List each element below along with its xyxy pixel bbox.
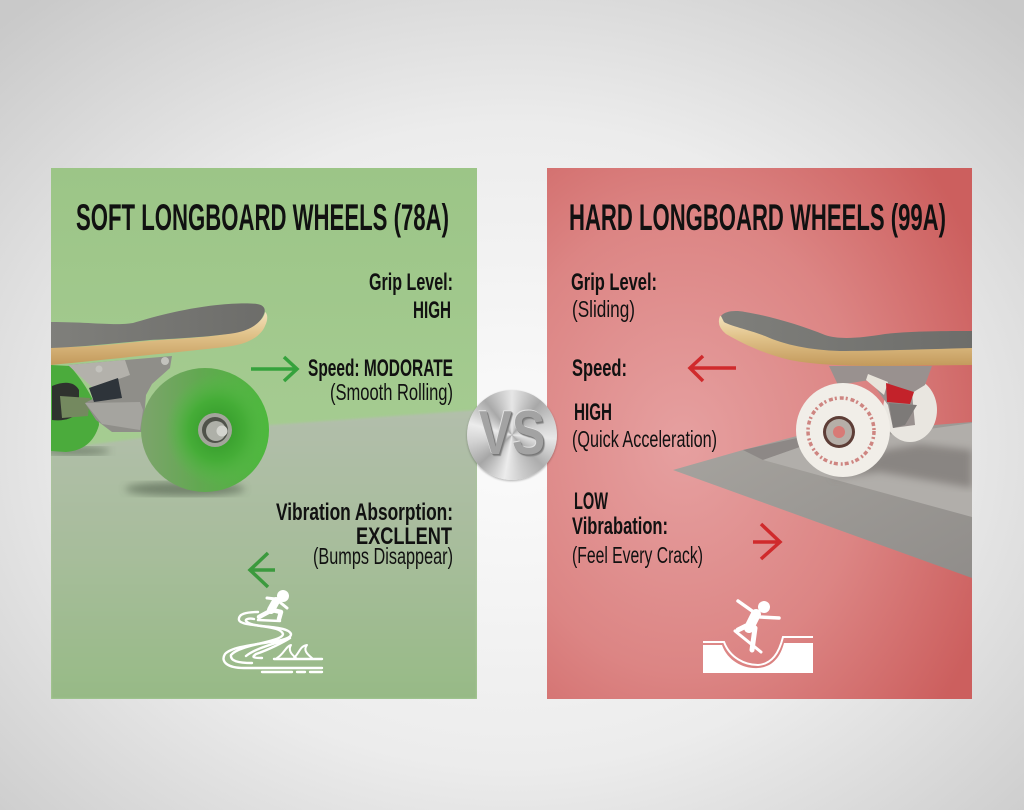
text: grip level hard: Grip Level:	[571, 269, 657, 296]
text: speed note hard: (Quick Acceleration)	[572, 426, 717, 452]
VS badge: VS	[479, 399, 545, 468]
truck	[829, 366, 932, 428]
text: vibration note soft: (Bumps Disappear)	[313, 543, 453, 569]
panel: hard wheels	[547, 168, 972, 699]
rear white wheel	[883, 378, 937, 442]
icon: skater on half pipe	[703, 601, 813, 673]
text: speed value hard: HIGH	[574, 399, 612, 426]
text: speed note soft: (Smooth Rolling)	[330, 379, 453, 405]
deck	[719, 316, 972, 366]
VS badge	[467, 390, 557, 480]
panel: soft wheels	[40, 168, 477, 699]
deck	[51, 312, 267, 365]
heading: soft: SOFT LONGBOARD WHEELS (78A)	[76, 197, 449, 238]
skateboard: hard wheels	[719, 311, 972, 488]
arrow: speed left	[690, 356, 736, 381]
text: vibration value hard: LOW	[574, 488, 608, 515]
ground surface	[51, 410, 477, 699]
text: vibration note hard: (Feel Every Crack)	[572, 542, 703, 568]
text: speed soft: Speed: MODORATE	[308, 355, 453, 382]
arrow: speed right	[251, 357, 297, 381]
front white wheel	[796, 383, 890, 477]
arrow: vibration right	[753, 524, 780, 559]
icon: skater on winding road	[224, 590, 322, 672]
text: vibration soft: Vibration Absorption:	[276, 499, 453, 526]
text: grip note hard: (Sliding)	[572, 296, 635, 322]
concrete slab	[673, 422, 972, 578]
text: vibration value soft: EXCLLENT	[356, 523, 452, 550]
main green wheel	[141, 368, 269, 492]
text: speed hard: Speed:	[572, 355, 627, 382]
skateboard: soft wheels	[40, 303, 269, 496]
text: grip level soft: Grip Level:	[369, 269, 453, 296]
text: vibration hard: Vibrabation:	[572, 513, 668, 540]
text: grip value soft: HIGH	[413, 297, 451, 324]
arrow: vibration left	[250, 553, 275, 587]
truck	[68, 356, 172, 432]
rear green wheel	[51, 365, 99, 452]
